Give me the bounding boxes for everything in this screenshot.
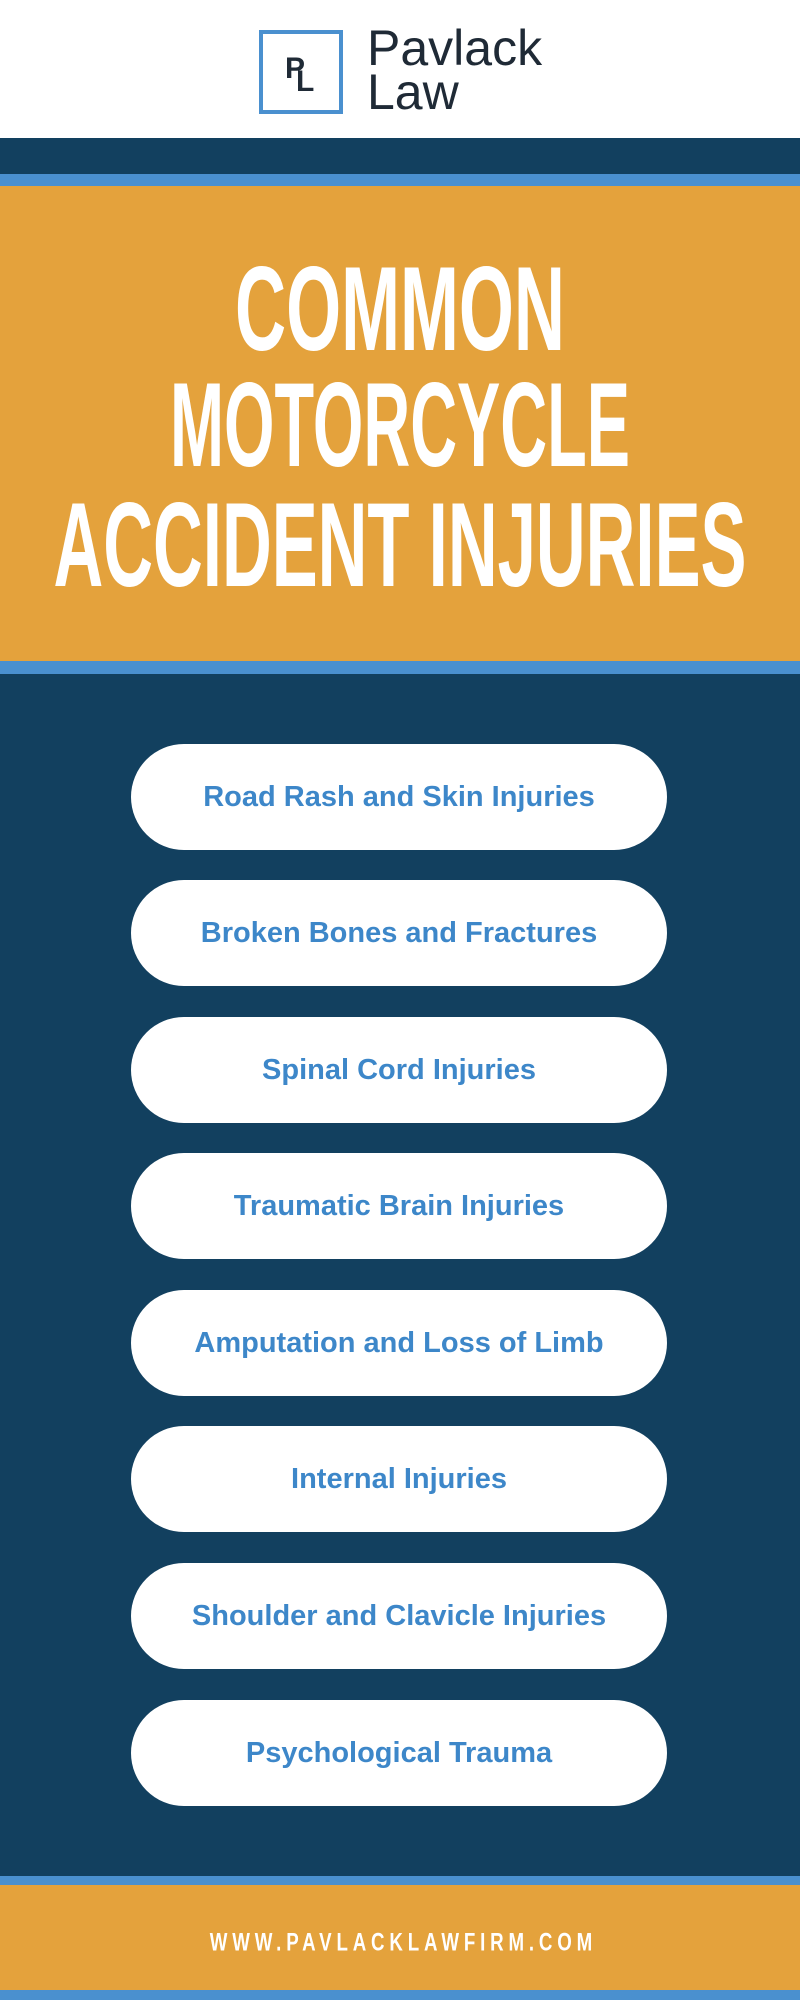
icon: logo box <box>259 30 343 114</box>
pill: psychological <box>131 1700 667 1806</box>
pill: amputation <box>131 1290 667 1396</box>
logo text: Pavlack <box>367 20 542 76</box>
footer url: WWW.PAVLACKLAWFIRM.COM <box>210 1928 592 1956</box>
icon: logo box: P <box>285 52 305 85</box>
pill: brain: Traumatic Brain Injuries <box>234 1190 564 1222</box>
pill: broken bones <box>131 880 667 986</box>
pill: shoulder <box>131 1563 667 1669</box>
pill: shoulder: Shoulder and Clavicle Injuries <box>192 1600 606 1632</box>
pill: brain <box>131 1153 667 1259</box>
footer <box>0 1885 800 1990</box>
title: COMMON <box>235 242 565 376</box>
pill: spinal cord: Spinal Cord Injuries <box>262 1054 536 1086</box>
pill: road rash <box>131 744 667 850</box>
pill: psychological: Psychological Trauma <box>246 1736 552 1768</box>
icon: logo box: L <box>296 65 314 98</box>
pill: internal: Internal Injuries <box>291 1462 507 1494</box>
pill: road rash: Road Rash and Skin Injuries <box>203 780 595 812</box>
pill: amputation: Amputation and Loss of Limb <box>194 1326 604 1358</box>
panel: injuries list <box>0 674 800 1876</box>
title <box>54 242 746 612</box>
header band <box>0 138 800 174</box>
logo <box>259 20 542 120</box>
title panel <box>0 186 800 661</box>
logo text: Law <box>367 64 459 120</box>
pill: broken bones: Broken Bones and Fractures <box>201 916 597 948</box>
logo text <box>367 20 542 120</box>
pill: internal <box>131 1426 667 1532</box>
pill: spinal cord <box>131 1017 667 1123</box>
